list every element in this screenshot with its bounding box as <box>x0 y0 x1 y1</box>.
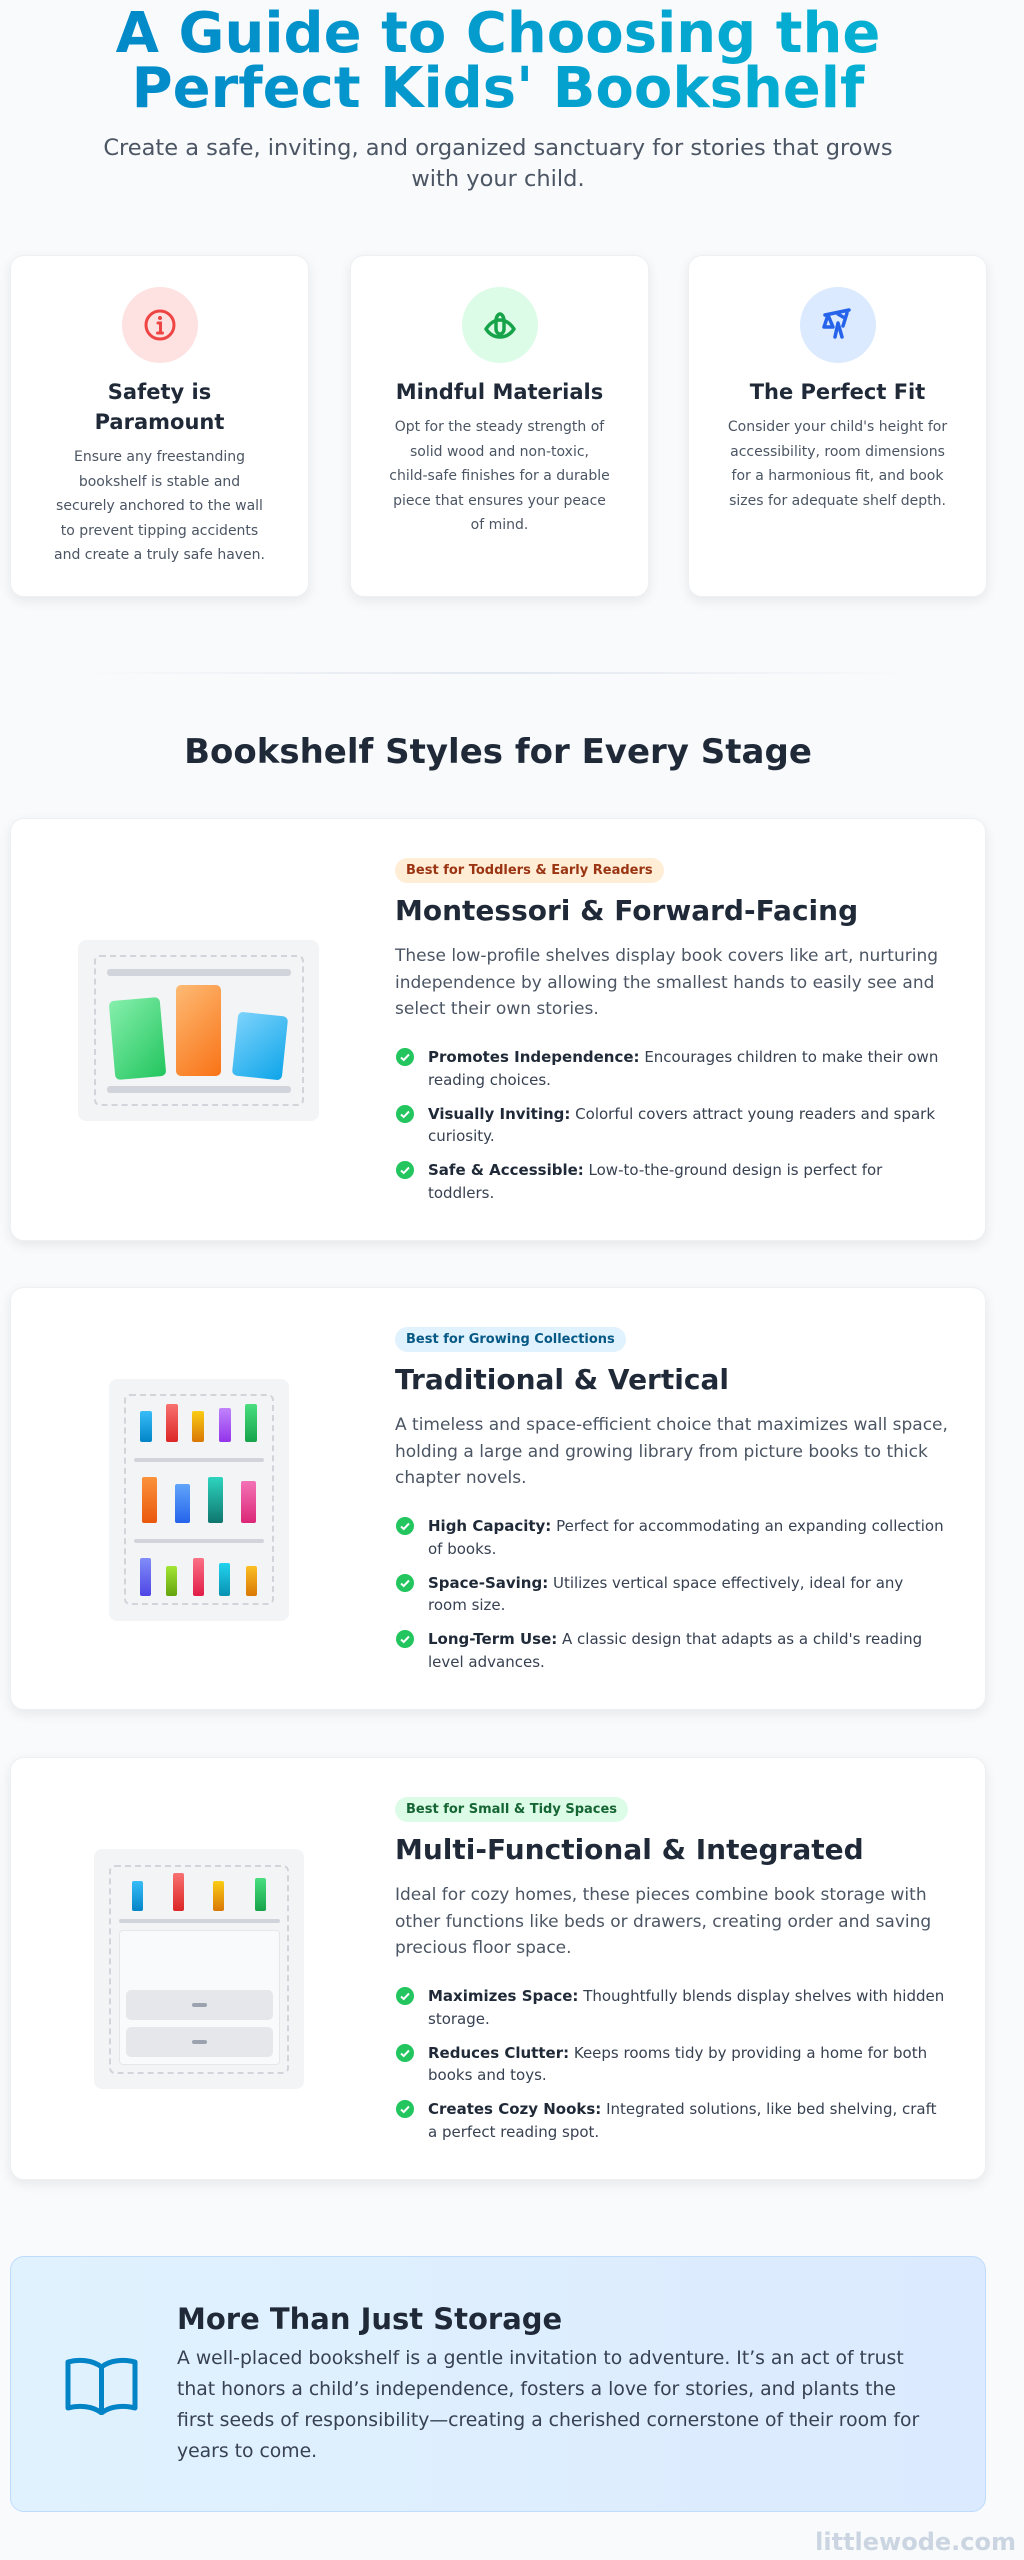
text: solid wood and non-toxic, <box>410 444 589 460</box>
text: Consider your child's height for <box>728 419 947 435</box>
bullet: books and toys. <box>428 2066 547 2084</box>
panel: fit <box>688 255 987 597</box>
text: A well-placed bookshelf is a gentle invitation to adventure. It’s an act of trust <box>177 2348 904 2369</box>
description <box>394 946 938 1019</box>
bullet: Safe & Accessible: Low-to-the-ground design is perfect for <box>428 1161 882 1179</box>
illustration: forward-facing shelf <box>78 940 319 1121</box>
bullet: curiosity. <box>428 1127 495 1145</box>
text <box>389 419 610 533</box>
title: Perfect Kids' Bookshelf <box>132 56 864 121</box>
badge: Best for Growing Collections <box>406 1332 615 1347</box>
text: piece that ensures your peace <box>393 492 606 508</box>
badge: Best for Small & Tidy Spaces <box>406 1802 617 1817</box>
bullet: Space-Saving: Utilizes vertical space effectively, ideal for any <box>428 1574 903 1592</box>
footer: brand: littlewode.com <box>815 2528 1016 2556</box>
bullet <box>396 2100 937 2140</box>
badge: Best for Toddlers & Early Readers <box>406 863 653 878</box>
bullet: a perfect reading spot. <box>428 2122 599 2140</box>
bullet: Creates Cozy Nooks: Integrated solutions, like bed shelving, craft <box>428 2100 937 2118</box>
section heading: Bookshelf Styles for Every Stage <box>184 732 812 772</box>
bullet: Visually Inviting: Colorful covers attract young readers and spark <box>428 1104 935 1122</box>
bullet: room size. <box>428 1596 505 1614</box>
text: Ensure any freestanding <box>74 449 245 465</box>
text: to prevent tipping accidents <box>61 522 258 538</box>
text <box>54 449 265 563</box>
title <box>0 6 996 116</box>
icon: eye leaf <box>462 287 538 363</box>
bullet: Promotes Independence: Encourages children to make their own <box>428 1048 938 1066</box>
text <box>728 419 948 508</box>
description: select their own stories. <box>395 999 599 1019</box>
text: bookshelf is stable and <box>79 474 240 490</box>
title: A Guide to Choosing the <box>116 1 880 66</box>
bullet <box>396 1104 935 1145</box>
panel: traditional <box>10 1287 986 1710</box>
description: independence by allowing the smallest hands to easily see and <box>395 972 934 992</box>
text: for a harmonious fit, and book <box>732 468 943 484</box>
bullet <box>396 1574 903 1614</box>
callout: more than storage <box>10 2256 986 2512</box>
panel: multi-functional <box>10 1757 986 2180</box>
text: years to come. <box>177 2441 317 2462</box>
description: chapter novels. <box>395 1468 527 1488</box>
bullet: Maximizes Space: Thoughtfully blends display shelves with hidden <box>428 1987 944 2005</box>
description <box>395 1415 948 1488</box>
bullet: level advances. <box>428 1652 545 1670</box>
icon: scale <box>800 287 876 363</box>
icon: open book <box>66 2358 138 2415</box>
text: of mind. <box>471 517 528 533</box>
badge <box>395 858 664 883</box>
description: precious floor space. <box>395 1938 572 1958</box>
icon: info <box>122 287 198 363</box>
bullet <box>396 1161 882 1202</box>
heading: Mindful Materials <box>396 380 603 404</box>
bullet: storage. <box>428 2010 490 2028</box>
panel: materials <box>350 255 649 597</box>
text: that honors a child’s independence, fosters a love for stories, and plants the <box>177 2379 896 2400</box>
bullet: toddlers. <box>428 1184 494 1202</box>
bullet <box>396 1048 938 1088</box>
text: Opt for the steady strength of <box>395 419 604 435</box>
heading: Paramount <box>95 410 224 434</box>
subtitle <box>103 135 893 192</box>
heading: Safety is <box>108 380 211 404</box>
text: first seeds of responsibility—creating a cherished cornerstone of their room for <box>177 2410 919 2431</box>
subtitle: Create a safe, inviting, and organized sanctuary for stories that grows <box>103 135 893 161</box>
description: holding a large and growing library from picture books to thick <box>395 1442 928 1462</box>
bullet <box>396 1517 944 1558</box>
badge <box>395 1327 626 1352</box>
bullet: Long-Term Use: A classic design that adapts as a child's reading <box>428 1630 922 1648</box>
text: securely anchored to the wall <box>56 498 263 514</box>
panel: safety <box>10 255 309 597</box>
text: child-safe finishes for a durable <box>389 468 610 484</box>
description: other functions like beds or drawers, creating order and saving <box>395 1912 931 1932</box>
illustration: vertical shelf <box>109 1379 289 1621</box>
heading: Traditional & Vertical <box>395 1363 729 1396</box>
illustration: shelf with drawers <box>94 1849 304 2089</box>
bullet <box>396 1630 922 1670</box>
description: These low-profile shelves display book covers like art, nurturing <box>395 946 938 966</box>
bullet: Reduces Clutter: Keeps rooms tidy by providing a home for both <box>428 2044 927 2062</box>
description <box>395 1885 931 1958</box>
panel: montessori <box>10 818 986 1241</box>
bullet: reading choices. <box>428 1070 551 1088</box>
badge <box>395 1797 628 1822</box>
bullet <box>396 2044 927 2084</box>
text: and create a truly safe haven. <box>54 547 265 563</box>
description: Ideal for cozy homes, these pieces combine book storage with <box>395 1885 927 1905</box>
heading <box>95 380 224 434</box>
bullet <box>396 1987 944 2028</box>
heading: The Perfect Fit <box>750 380 925 404</box>
text: sizes for adequate shelf depth. <box>729 492 946 508</box>
subtitle: with your child. <box>411 166 585 192</box>
heading: Montessori & Forward-Facing <box>395 894 858 927</box>
bullet: of books. <box>428 1540 496 1558</box>
text <box>177 2348 920 2462</box>
text: accessibility, room dimensions <box>730 444 945 460</box>
bullet: High Capacity: Perfect for accommodating an expanding collection <box>428 1517 944 1535</box>
heading: Multi-Functional & Integrated <box>395 1833 864 1866</box>
description: A timeless and space-efficient choice that maximizes wall space, <box>395 1415 948 1435</box>
heading: More Than Just Storage <box>177 2302 562 2336</box>
